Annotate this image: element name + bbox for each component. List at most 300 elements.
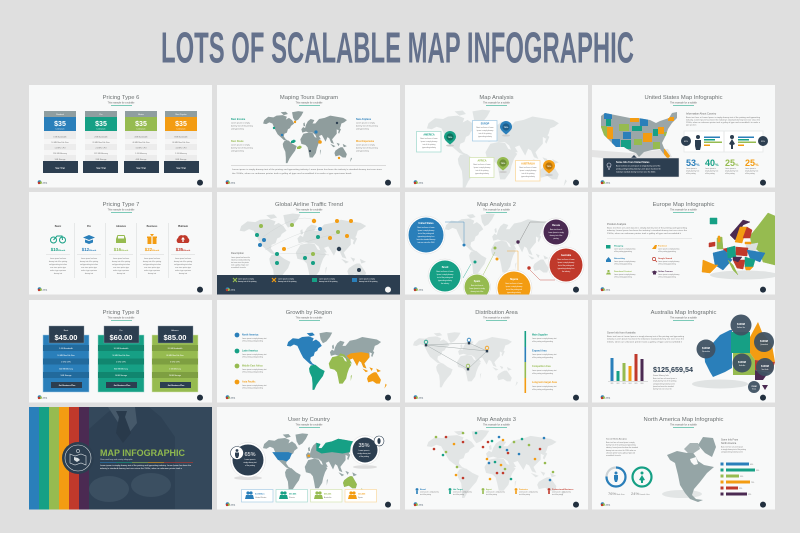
bar chart: 30% — [740, 476, 744, 478]
pin: Australia: 70% — [547, 166, 551, 168]
bar chart — [720, 462, 760, 496]
text: product analysis: Product Analysis — [607, 222, 627, 226]
pin: Africa — [497, 157, 509, 173]
circle: Australia: Australia — [561, 254, 572, 257]
heading: Australia Map Infographic — [651, 310, 716, 316]
description: Lorem ipsum is simply dummy text of the printing and typesetting industry. Lorem Ipsum has been the industry's standard dummy text ever since — [232, 168, 382, 171]
bar chart: 2011 — [611, 383, 614, 385]
circle: Nigeria: Ipsum is simply dummy — [506, 286, 522, 288]
heading — [475, 310, 519, 321]
stat circle 35%: 35% — [358, 443, 370, 449]
text: some info: industry. Lorem Ipsum has been the industry's standard dummy text ever since the — [607, 338, 684, 341]
comparison box: 35% — [761, 141, 765, 143]
logo and page marker — [601, 180, 766, 186]
value bubbles: $100M — [702, 346, 710, 350]
region: Middle East Africa: Middle East Africa — [242, 364, 263, 368]
plan: basic: and typesetting text when — [49, 263, 67, 266]
cover text: Lorem ipsum is simply dummy text of the printing and typesetting industry. Lorem Ipsum has been the — [100, 464, 191, 467]
value bubbles: $10M — [751, 386, 757, 388]
legend: brand: Lorem ipsum is simply dummy — [420, 492, 439, 494]
pricing column: most popular — [164, 111, 199, 173]
big number — [653, 365, 694, 391]
legend: professional business: text of the printing — [552, 493, 563, 496]
feature: shopping: of the printing typesetting — [614, 250, 632, 253]
stat 25% green: 25% — [725, 158, 739, 168]
cover text — [100, 448, 193, 470]
pin: blue — [467, 338, 471, 344]
circle: Russia: printing — [553, 237, 559, 240]
text: social media analysis: unknown printer took a galley of type and — [606, 451, 635, 454]
pricing column: pro: Pro — [100, 113, 102, 116]
heading: This example for a subtitle — [483, 424, 511, 426]
stat 25% orange: of the printing — [745, 172, 755, 175]
description: took a galley of type and — [231, 264, 248, 266]
pricing column: standard: $35 — [54, 121, 66, 128]
pricing column: standard: 1GB Storage — [55, 158, 65, 161]
text: social media analysis: Basic text here at Lorem Ipsum is simply — [606, 441, 635, 444]
region: Middle East Africa: of the printing and typesetting — [242, 370, 263, 374]
feature: online courses: of the printing typesetting — [658, 276, 676, 278]
world map with highlights — [263, 433, 363, 495]
item: long term target area: Long term target Area — [532, 381, 558, 384]
plan: pro: Lorem ipsum has been — [81, 258, 97, 260]
circle: United States: Basic text here at Lorem — [417, 226, 435, 229]
pin: America: 70% — [448, 137, 452, 139]
heading: Maping Tours Diagram — [280, 95, 338, 101]
plan: advance: dummy text of the printing — [112, 260, 130, 263]
circle: Spain: Lorem Ipsum is simply — [469, 288, 485, 290]
bar chart: 2016 — [641, 383, 644, 385]
cover text: Clean world map and country infographic — [100, 458, 133, 461]
item: expand area: of the printing and typesetting — [532, 356, 553, 359]
value bubbles: $100M — [737, 322, 745, 326]
shadow — [592, 149, 672, 158]
region: Middle East Africa — [235, 364, 267, 374]
circle: United States: United States — [418, 222, 434, 225]
stat 53%: of the printing — [686, 172, 696, 175]
text: social media analysis: Social Media Analysis — [606, 438, 628, 440]
plan: platinum: $35 /Month — [176, 247, 191, 252]
pricing card: basic: Get Business Plan — [59, 384, 76, 387]
plan: basic: dummy text — [54, 272, 63, 275]
text: information about country: type specimen — [686, 124, 696, 127]
description: Description — [231, 251, 245, 255]
item: long term target area: Lorem ipsum is simply dummy text — [532, 385, 557, 388]
pricing card: basic: 1 GHz CPU — [61, 362, 72, 364]
route lines — [426, 343, 487, 369]
pricing column: most popular: 80 MB Max File Size — [172, 142, 190, 144]
legend: factories: text of the printing — [519, 493, 530, 496]
plan: advance — [109, 225, 133, 275]
panel: Australia Map Infographic — [592, 300, 775, 402]
logo and page marker — [38, 180, 203, 186]
donut chart: male: 76% Male User — [608, 491, 625, 496]
heading: This example for a subtitle — [108, 316, 135, 320]
stat 40%: of the printing — [705, 172, 715, 175]
circle: Spain: Spain — [474, 280, 481, 283]
heading: This example for a subtitle — [483, 208, 511, 212]
description — [231, 165, 386, 175]
callout: most expensive: Lorem ipsum is simply — [356, 144, 375, 146]
plan: business: ever since printer type — [144, 266, 160, 269]
feature: google search: Google Search — [658, 258, 673, 260]
heading: North America Map Infographic — [644, 417, 724, 423]
text: information about country: Information About Country — [686, 112, 717, 116]
dark legend band: dummy text of the printing — [238, 280, 256, 283]
vertical color bar — [524, 331, 526, 393]
bar chart: 2012 — [617, 383, 620, 385]
callout: best income: dummy text of the printing — [231, 124, 253, 128]
description: industry's standard dummy — [231, 258, 250, 262]
pin: Australia — [543, 160, 555, 176]
callout: most expensive: Most Expensive — [356, 140, 375, 143]
feature: download content: Download Content — [614, 270, 632, 273]
world map — [263, 111, 352, 163]
pricing card: pro: 2 GHz CPU — [116, 362, 127, 364]
logo and page marker — [226, 180, 391, 186]
plan: advance: make a type specimen — [113, 269, 129, 272]
callout: America: AMERICA — [423, 134, 435, 136]
heading: Map Analysis 2 — [477, 202, 516, 208]
map of Europe — [702, 213, 775, 275]
heading: Global Airline Traffic Trend — [275, 202, 343, 208]
heading — [288, 417, 330, 428]
heading — [103, 202, 139, 213]
legend: hot target: Lorem ipsum is simply dummy — [453, 492, 472, 494]
pricing card: basic: 5 GB Bandwidth — [59, 347, 73, 350]
heading: This example for a subtitle — [296, 316, 323, 320]
callout: America — [416, 132, 441, 152]
pricing card: pro: 800 MB Memory — [114, 368, 128, 370]
stat 53%: Lorem ipsum is — [686, 168, 697, 170]
stat circle 65% — [230, 442, 266, 480]
callout: Europe: EUROP — [481, 122, 490, 126]
stat 40% — [705, 160, 718, 174]
text: social media analysis — [606, 438, 638, 457]
feature: networking: Networking — [614, 257, 626, 260]
feature: online courses: Online Courses — [658, 271, 674, 273]
panel: Distribution Area — [405, 300, 588, 402]
circle: Brazil: Basic text here at Lorem — [436, 270, 454, 273]
plan: business: Lorem ipsum has been — [144, 258, 160, 260]
circle: Spain: dummy text of the — [471, 290, 483, 293]
map pins — [462, 240, 531, 270]
plan: pro: Pro — [87, 225, 92, 228]
item: expand area — [532, 350, 557, 359]
logo and page marker — [38, 287, 203, 293]
panel: Pricing Type 7 — [29, 192, 212, 294]
stat 25% orange: simply dummy text — [745, 170, 759, 172]
plan: basic: Basic — [55, 225, 62, 228]
callout: Africa: AFRICA — [477, 160, 487, 162]
heading: Pricing Type 6 — [103, 95, 139, 101]
dark information box: industry's standard dummy text ever since the 1500s — [616, 170, 655, 174]
big number: simply dummy text of the printing — [653, 380, 676, 383]
feature: download content: Lorem ipsum is simply dummy — [614, 274, 636, 276]
callout: new airplane: New Airplane — [356, 118, 372, 121]
pricing column: pro: Lorem ipsum — [97, 128, 106, 131]
legend: hot target: Hot Target — [453, 488, 463, 491]
pricing column: standard: 10 MB Max File Size — [51, 142, 69, 144]
bar chart: 90% — [756, 470, 760, 472]
heading — [477, 202, 516, 213]
plan: platinum: ever since printer type — [175, 266, 191, 269]
stat circle 35%: of the printing — [359, 455, 369, 458]
stat 25% orange: Lorem ipsum is — [745, 168, 756, 170]
pricing column: master: 3.2GHz CPU — [136, 148, 147, 150]
pricing column: master — [124, 111, 159, 173]
pricing column: standard: Standard — [56, 113, 64, 116]
heading — [644, 417, 724, 428]
callout: best income: and typesetting — [231, 128, 244, 130]
heading — [103, 95, 139, 106]
panel: Maping Tours Diagram — [217, 85, 400, 188]
heading: This example for a subtitle — [296, 424, 323, 426]
feature: shopping — [606, 245, 636, 253]
region: North America — [235, 333, 267, 342]
dark legend band: dummy text of the printing — [319, 280, 337, 283]
logo and page marker — [601, 395, 766, 401]
callout: Australia: AUSTRALIA — [521, 162, 535, 166]
dark legend band: Lorem ipsum is simply — [238, 278, 254, 280]
pricing card: advance: $85.00 — [164, 333, 186, 342]
plan: advance: ever since printer type — [113, 266, 129, 269]
callout: best income — [231, 118, 253, 130]
heading — [651, 310, 716, 321]
item: long term target area — [532, 381, 558, 391]
panel: North America Map Infographic — [592, 407, 775, 510]
heading: This example for a subtitle — [670, 208, 698, 212]
callout: most expensive: dummy text of the printing — [356, 146, 378, 150]
circle: United States: text ever since the 1500 — [418, 241, 435, 244]
scattered map pins — [433, 432, 554, 481]
stat 53% — [686, 160, 700, 174]
stat circle 35%: Lorem ipsum is — [359, 450, 370, 452]
text: social media analysis: dummy text of the printing and typesetting — [606, 444, 636, 447]
dark legend band — [217, 275, 400, 294]
dark information box: printing and typesetting industry. Lorem Ipsum has been the — [616, 168, 661, 170]
stat circle 35% — [350, 436, 384, 469]
circle: United States: been the standard dummy — [417, 238, 435, 241]
bar chart: 2013 — [623, 383, 626, 385]
text: some info: 1500s, when an unknown printer took a galley of type and scrambled it — [607, 340, 683, 343]
plan: platinum: make a type specimen — [175, 269, 191, 272]
region: Latin America: Lorem ipsum is simply dummy text — [242, 353, 267, 356]
callout: most expensive — [356, 140, 378, 152]
callout: Europe: Basic text here at Lorem — [476, 126, 494, 129]
circle: Nigeria: text of the printing and — [506, 288, 522, 291]
pricing card: advance: 20 GB Bandwidth — [168, 347, 182, 350]
heading — [286, 310, 332, 321]
feature: purchase: Purchase — [658, 246, 668, 248]
legend: professional business: Professional Business — [552, 489, 574, 491]
world map — [240, 214, 374, 285]
item: main supplier: Lorem ipsum is simply dummy text — [532, 337, 557, 340]
pricing column: standard: 1GB Bandwidth — [53, 136, 67, 138]
donut chart: female: 24% Female User — [631, 491, 650, 496]
circle: Brazil: the industry — [441, 282, 449, 285]
stat box: Australia: 456,356 — [324, 492, 332, 496]
big number: $125,659,54 — [653, 365, 694, 374]
world map — [445, 213, 555, 280]
callout: Africa: Basic text here at Lorem — [473, 163, 491, 166]
stat 40%: 40% — [705, 158, 719, 168]
region: Latin America: of the printing and typesetting — [242, 356, 263, 358]
stat 25% green: simply dummy text — [725, 170, 739, 172]
pin: Africa: 70% — [501, 163, 505, 165]
description: the 1500s, when an unknown printer took a galley of type and scrambled it to make a type specimen book. — [232, 172, 353, 175]
value bubbles: Western Aus — [702, 350, 710, 353]
pricing card: advance: 1 GB Memory — [169, 368, 181, 370]
logo and page marker — [414, 180, 579, 186]
legend: agent: text of the printing — [486, 493, 497, 496]
legend: hot target: text of the printing — [453, 493, 464, 496]
plan: basic: $10 /Month — [51, 247, 66, 252]
stat box: Spain: 123,535 — [358, 494, 366, 496]
feature: download content: of the printing typesetting — [614, 276, 632, 278]
stat circle 65%: 65% — [244, 452, 256, 458]
region: Middle East Africa: Lorem ipsum is simply dummy text — [242, 368, 267, 371]
feature: google search: of the printing typesetting — [658, 262, 676, 266]
stat circle 35%: simply dummy text — [357, 452, 371, 455]
pin: Europe — [500, 121, 512, 136]
bar chart: 2015 — [635, 383, 638, 385]
callout: Europe — [472, 120, 497, 141]
pin: America — [444, 131, 456, 146]
plan: business: $22 /Month — [145, 247, 160, 252]
value bubbles: $100M — [761, 364, 769, 368]
item: main supplier: Main Supplier — [532, 334, 548, 336]
pricing card: basic: Basic — [64, 330, 68, 332]
legend: brand: text of the printing — [420, 493, 431, 496]
pricing column: pro: 2GB Bandwidth — [94, 136, 108, 138]
plan: pro: dummy text of the printing — [80, 260, 98, 263]
map badge icon — [62, 442, 94, 474]
callout: new airplane — [356, 118, 378, 130]
plan: business: and typesetting text when — [143, 263, 161, 266]
pricing column: pro: 20 MB Max File Size — [92, 142, 110, 144]
circle: Nigeria: typesetting industry — [507, 291, 521, 294]
pricing card: pro — [98, 326, 144, 392]
circle: Nigeria: Basic text here at Lorem — [505, 282, 523, 285]
stat 25% orange: 25% — [745, 158, 759, 168]
feature: online courses: Lorem ipsum is simply dummy — [658, 274, 680, 276]
dark information box — [603, 155, 679, 177]
feature: purchase: Lorem ipsum is simply dummy — [658, 248, 680, 250]
panel: Pricing Type 8 — [29, 300, 212, 402]
heading: This example for a subtitle — [670, 102, 698, 104]
callout: Africa: Ipsum is simply dummy — [474, 167, 490, 169]
circle: United States: typesetting industry has — [418, 235, 435, 238]
value bubbles: $100M — [738, 360, 746, 364]
plan: business: dummy text of the printing — [143, 260, 161, 263]
panel: United States Map Infographic — [592, 85, 775, 188]
feature: purchase — [652, 245, 680, 253]
plan: platinum: Platinum — [178, 225, 188, 228]
region: North America: of the printing and typesetting — [242, 340, 263, 342]
stat circle 65%: simply dummy text — [243, 461, 257, 464]
big number: Ipsum has been the standard — [653, 385, 674, 388]
text: some info: is simply dummy text of the printing — [721, 448, 746, 451]
text: some info: Some Info From — [721, 438, 738, 442]
item: main supplier: of the printing and typesetting — [532, 340, 553, 343]
feature: shopping: Lorem ipsum is simply dummy — [614, 248, 636, 250]
pricing card: pro: 10 GB Bandwidth — [114, 347, 128, 350]
legend: factories: Lorem ipsum is simply dummy — [519, 492, 538, 494]
pricing column: pro — [83, 111, 118, 173]
region: Latin America: Latin America — [242, 350, 258, 352]
text: some info: Some Info from Australia — [607, 330, 636, 334]
circle: Spain: Basic text here at — [471, 284, 484, 287]
callout: Australia: Ipsum is simply dummy — [520, 170, 536, 172]
stat 25% green — [725, 160, 738, 174]
circle: United States: text of the printing and — [418, 232, 434, 235]
bar chart — [608, 354, 648, 385]
map of North America — [667, 437, 716, 502]
plan: advance: and typesetting text when — [112, 263, 130, 266]
callout: Australia: typesetting industry — [521, 175, 535, 178]
logo and page marker — [38, 395, 203, 401]
pricing column: most popular: 8GB Bandwidth — [174, 136, 188, 138]
feature: networking — [606, 257, 636, 266]
item: competitor area: Lorem ipsum is simply dummy text — [532, 369, 557, 372]
text: product analysis: Basic text here at Lorem Ipsum is simply dummy text of the printing and typesetting — [607, 226, 687, 230]
pricing column: master: 1 GB Memory — [135, 152, 147, 155]
plan: pro: ever since printer type — [81, 266, 97, 269]
pricing card: advance: 80 MB Max File Size — [166, 355, 184, 357]
circle: Australia: Ipsum is simply dummy — [558, 262, 574, 264]
logo and page marker — [226, 502, 391, 508]
map markers — [273, 121, 340, 159]
heading: Europe Map Infographic — [653, 202, 715, 208]
pricing column: standard: 1.2GHz CPU — [55, 148, 66, 150]
circle: United States — [407, 216, 445, 254]
pricing column: standard: 256 MB Memory — [53, 152, 67, 155]
heading — [645, 95, 723, 106]
panel: User by Country — [217, 407, 400, 510]
stat 53%: simply dummy text — [686, 170, 700, 172]
comparison box: 63% — [684, 141, 688, 143]
pricing card: advance: Advance — [171, 329, 179, 332]
logo — [226, 287, 391, 293]
callout: Africa: text of the printing — [476, 169, 488, 172]
pricing column: master: Lorem ipsum — [137, 128, 146, 131]
plan: pro — [77, 225, 101, 275]
pricing column: most popular: 4.2GHz CPU — [176, 148, 187, 150]
item: expand area: Lorem ipsum is simply dummy text — [532, 353, 557, 356]
stat box: Russia: Russia — [289, 497, 296, 499]
text: product analysis: industry. Lorem Ipsum has been the industry's standard dummy text ever since the — [607, 229, 687, 232]
feature: shopping: Shopping — [614, 246, 624, 248]
stat box: Australia — [310, 490, 342, 502]
pricing card: basic: $45.00 — [55, 333, 77, 342]
item: long term target area: of the printing and typesetting — [532, 388, 553, 391]
text: product analysis — [607, 222, 692, 238]
plan: basic: Lorem ipsum has been — [50, 258, 66, 260]
world map — [427, 430, 564, 498]
heading: Pricing Type 8 — [103, 310, 139, 316]
heading — [653, 202, 715, 213]
logo and page marker — [601, 287, 766, 293]
bar chart: 60% — [750, 464, 754, 466]
pricing column: most popular: Star Trial — [176, 167, 186, 170]
comparison box — [681, 131, 768, 152]
dark information box: Some Info from United States — [616, 161, 650, 164]
circle: Australia — [548, 247, 584, 283]
map of Australia — [704, 322, 775, 390]
pricing column: pro: 2.2GHz CPU — [96, 148, 107, 150]
suit photo — [89, 407, 175, 509]
